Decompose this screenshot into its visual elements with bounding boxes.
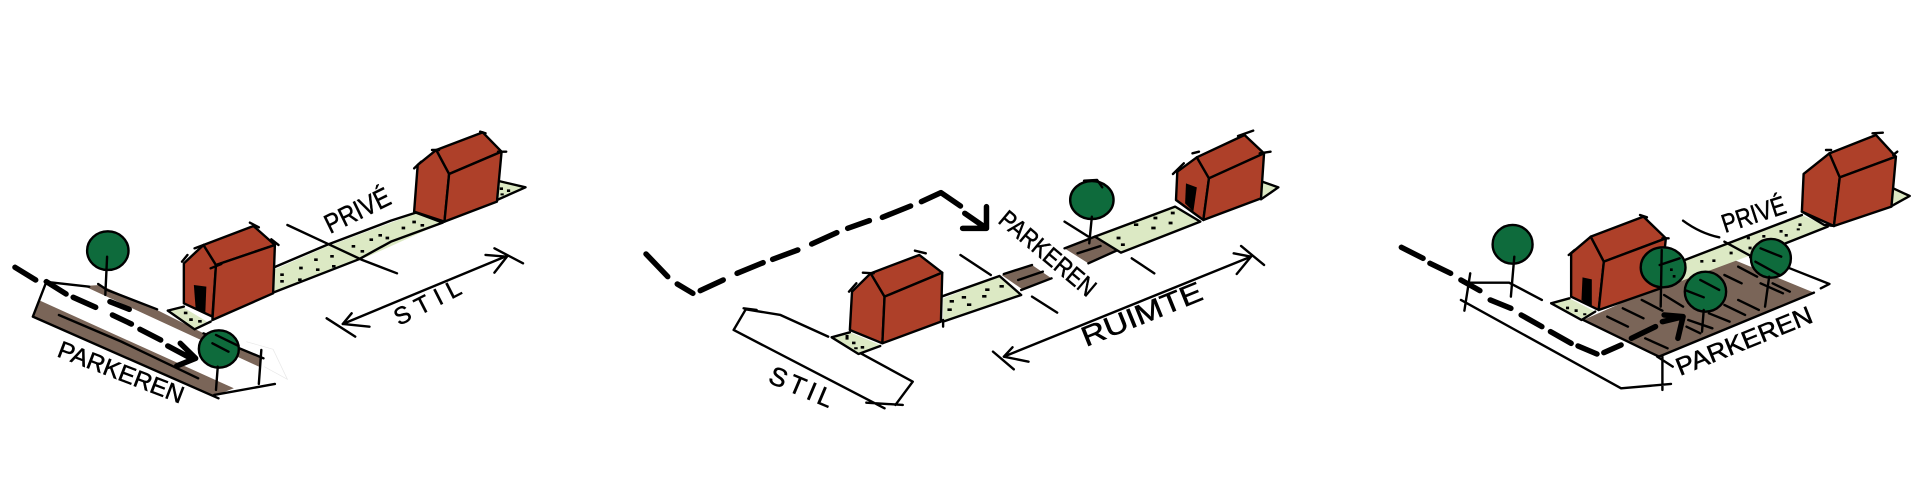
tree right xyxy=(199,330,239,390)
dashed route with arrow xyxy=(1401,247,1683,354)
drawing: street, houses and gardens xyxy=(15,132,526,398)
front yard xyxy=(1551,298,1595,320)
garden path xyxy=(1680,215,1828,282)
label: Parkeren: PARKEREN xyxy=(54,336,188,409)
house far xyxy=(1802,133,1910,226)
dashed route with arrow xyxy=(15,267,196,366)
tree court 3 xyxy=(1751,239,1791,307)
drawing: route, houses and gardens xyxy=(646,131,1278,408)
tree court 2 xyxy=(1685,272,1726,332)
front yard xyxy=(168,307,207,328)
dimension arrow: stil xyxy=(327,248,523,337)
label: Stil: STIL xyxy=(765,360,838,414)
garden outline and dots xyxy=(168,213,443,329)
label: Privé: PRIVÉ xyxy=(319,182,396,239)
street dimension lines xyxy=(33,282,275,398)
label: Parkeren: PARKEREN xyxy=(993,205,1102,302)
house near xyxy=(849,251,942,343)
dimension: stil xyxy=(734,308,913,408)
panel: parking court xyxy=(1401,133,1910,390)
court outline and bay marks xyxy=(1583,267,1814,357)
thin boundary dashes xyxy=(960,222,1154,313)
dimension arrow: ruimte xyxy=(993,246,1264,369)
label: Stil: STIL xyxy=(389,275,466,331)
panel: parking along the street xyxy=(15,132,526,409)
faint construction line xyxy=(246,342,287,379)
garden near xyxy=(937,276,1021,327)
tree left xyxy=(1493,225,1533,297)
house far xyxy=(1173,131,1278,220)
garden path xyxy=(273,213,443,293)
drawing: route, court, houses and trees xyxy=(1401,133,1910,390)
parking strip upper xyxy=(84,285,262,367)
parking court xyxy=(1583,257,1814,357)
parking strip lower xyxy=(34,301,234,396)
house far xyxy=(414,132,526,222)
label: Privé: PRIVÉ xyxy=(1718,190,1790,239)
dashed route with arrow xyxy=(646,193,986,293)
tree left xyxy=(87,231,129,295)
panel: parking at a distance xyxy=(646,131,1278,414)
tree court 1 xyxy=(1641,247,1685,307)
front yard xyxy=(832,332,880,354)
house near xyxy=(182,223,278,320)
tree xyxy=(1070,180,1114,243)
label: Ruimte: RUIMTE xyxy=(1077,276,1207,353)
house near xyxy=(1569,215,1669,310)
parking patch far xyxy=(1065,237,1118,263)
parking patch near xyxy=(1002,265,1052,290)
label: Parkeren: PARKEREN xyxy=(1672,301,1817,382)
garden far xyxy=(1095,207,1200,253)
dimension lines xyxy=(1461,221,1829,390)
